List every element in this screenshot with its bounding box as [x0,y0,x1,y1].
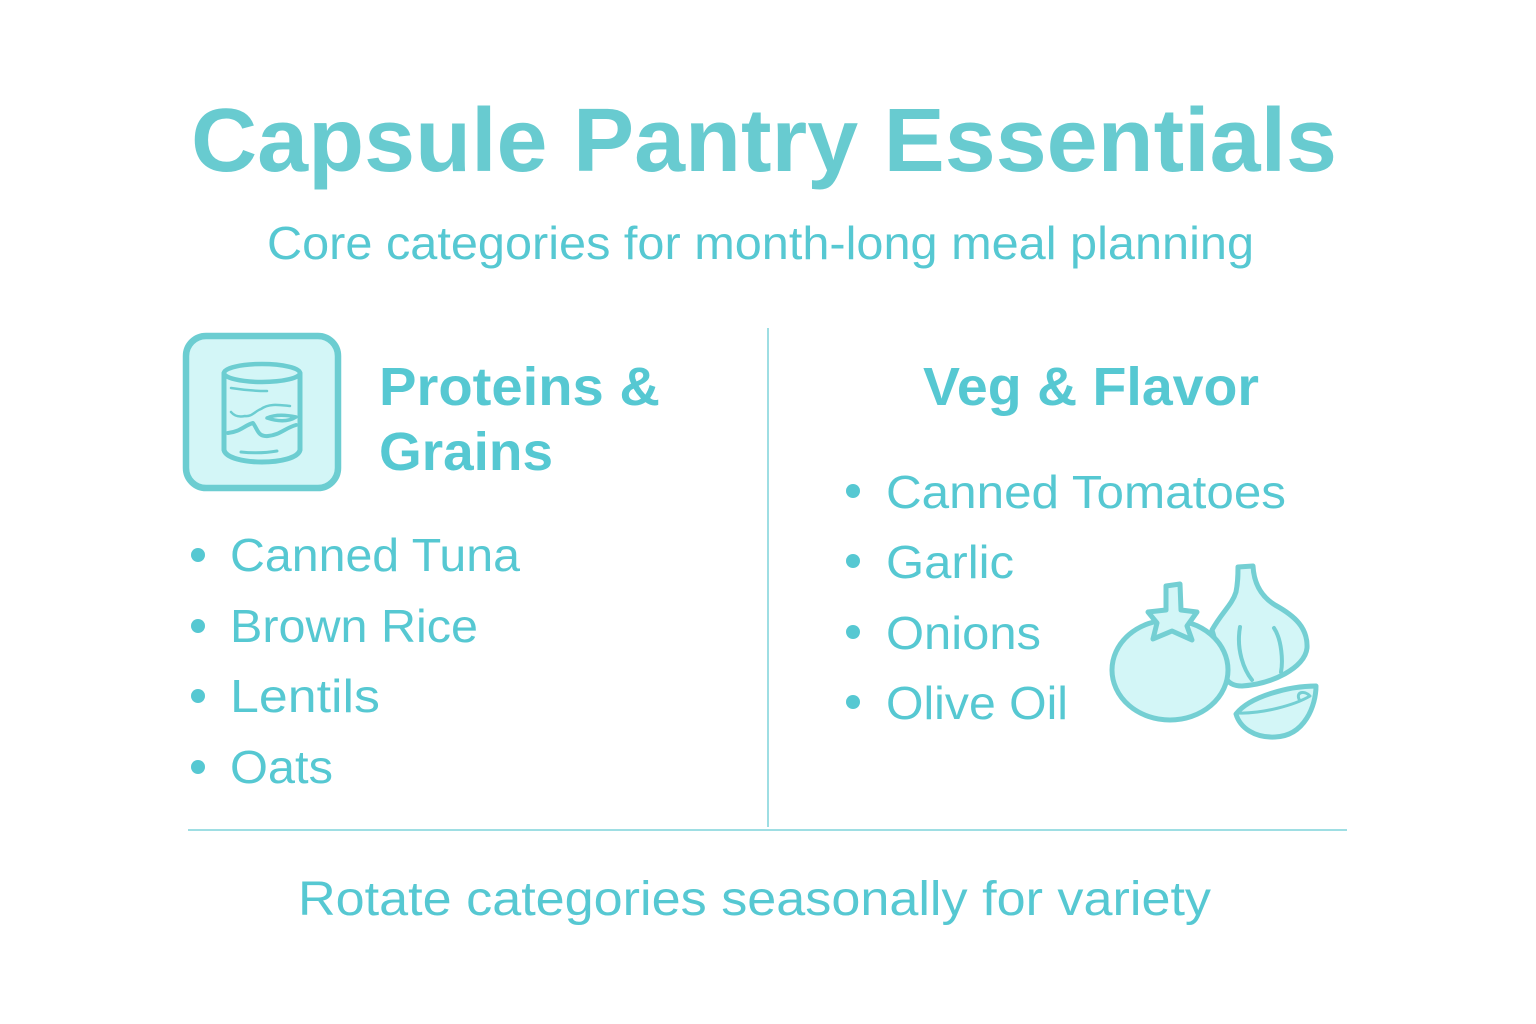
list: veg and flavor: Onions [886,607,1041,659]
heading: proteins and grains: Proteins & [379,357,660,417]
list: proteins and grains: Lentils [230,670,380,722]
garlic segments [1239,627,1282,680]
horizontal divider [188,829,1347,831]
icon: tomato [1112,620,1228,720]
list: veg and flavor: Olive Oil [886,677,1068,729]
icon: garlic bulb [1212,566,1307,686]
heading: proteins and grains [379,357,660,482]
list: veg and flavor [846,466,1286,729]
list: veg and flavor: Canned Tomatoes [886,466,1286,518]
panel: veg and flavor [846,357,1316,737]
panel: proteins and grains [186,336,660,793]
footer note: Rotate categories seasonally for variety [298,873,1211,926]
vertical divider [767,328,769,827]
list: veg and flavor: Garlic [886,536,1014,588]
list: proteins and grains: Canned Tuna [230,529,520,581]
icon: canned tuna [186,336,338,488]
subtitle: Core categories for month-long meal planning [267,217,1254,269]
heading: veg and flavor: Veg & Flavor [923,357,1259,417]
list: proteins and grains: Oats [230,741,333,793]
heading: proteins and grains: Grains [379,422,553,482]
icon: tomato and garlic [1112,566,1316,737]
list: proteins and grains [191,529,520,793]
title: Capsule Pantry Essentials [191,91,1337,191]
list: proteins and grains: Brown Rice [230,600,478,652]
icon: garlic clove [1236,686,1316,737]
